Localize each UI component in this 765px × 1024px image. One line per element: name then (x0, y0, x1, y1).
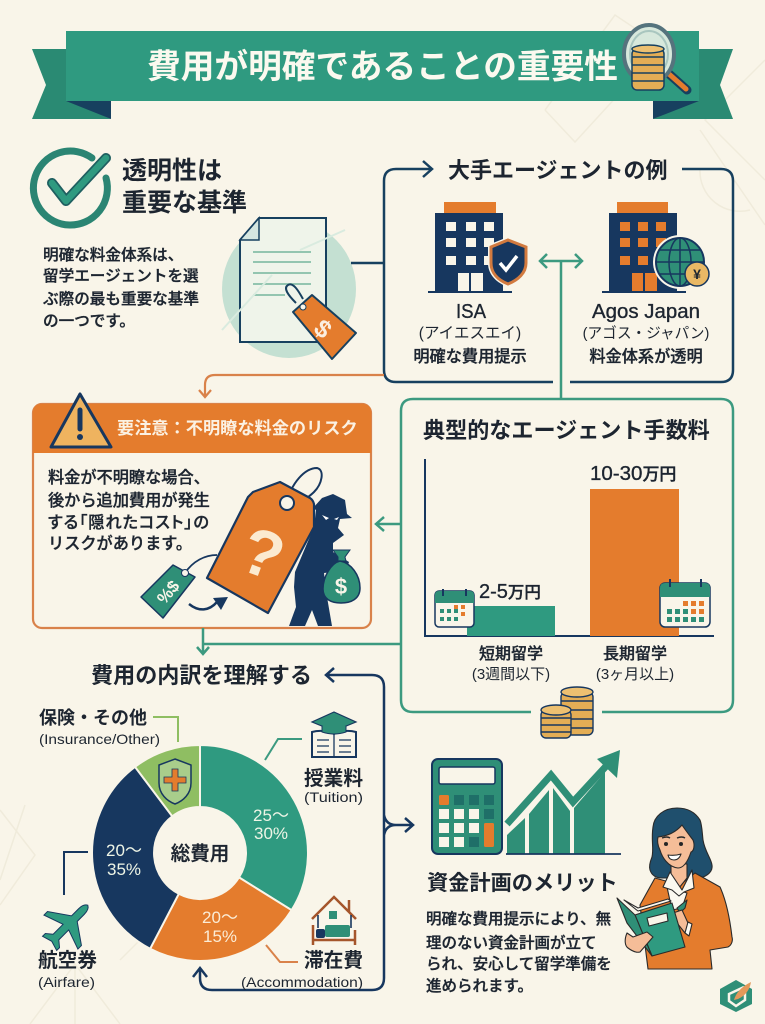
text block: funding benefits: 明確な費用提示により、無 (426, 910, 611, 928)
label: tuition: 授業料 (304, 768, 363, 790)
label: accommodation: (Accommodation) (241, 974, 363, 990)
icon: big price tag: ? (231, 511, 294, 595)
label: Agos Japan (583, 301, 709, 366)
value: short term: 2-5万円 (479, 581, 541, 603)
icon: document with price tag (222, 218, 356, 359)
connector: document to agents (351, 262, 384, 264)
icon: calendar short (435, 589, 474, 627)
panel: agent fees (401, 399, 733, 712)
heading: agent fees: 典型的なエージェント手数料 (423, 418, 710, 443)
label: airfare: (Airfare) (38, 974, 95, 990)
label: accommodation: 滞在費 (304, 950, 363, 972)
heading: transparency: 重要な基準 (122, 189, 247, 217)
label: Agos Japan: Agos Japan (592, 301, 700, 323)
icon: Agos Japan building (602, 202, 709, 292)
label: tuition (265, 739, 363, 805)
label: short term: (3週間以下) (472, 666, 550, 683)
text block: warning: 後から追加費用が発生 (48, 491, 210, 510)
heading: cost breakdown: 費用の内訳を理解する (91, 663, 312, 688)
arrow: agents to warning (199, 375, 384, 397)
text block: warning: リスクがあります。 (48, 534, 192, 553)
logo (720, 980, 752, 1012)
icon: check mark in circle (33, 151, 107, 225)
arrow: fees to warning (376, 517, 401, 531)
text block: transparency: ぶ際の最も重要な基準 (43, 290, 199, 308)
icon: small green tag (141, 555, 217, 618)
arrow: navy routing (193, 668, 413, 990)
label: Agos Japan: (アゴス・ジャパン) (583, 324, 709, 342)
label: tuition: (Tuition) (304, 789, 363, 805)
heading: warning: 要注意：不明瞭な料金のリスク (117, 418, 358, 438)
icon: house with bed (312, 897, 356, 945)
value: accommodation: 20〜 (202, 908, 238, 927)
icon: ISA building (428, 202, 529, 292)
label: airfare (38, 852, 97, 990)
value: tuition: 25〜 (253, 806, 289, 825)
chart: growth arrow (506, 750, 621, 854)
text block: warning (48, 468, 210, 553)
icon: Agos Japan building: ¥ (693, 266, 701, 282)
heading: funding benefits: 資金計画のメリット (427, 871, 618, 895)
icon: big price tag (207, 468, 322, 613)
label: ISA: 明確な費用提示 (413, 348, 527, 366)
icon: thief (289, 494, 360, 626)
label: long term: 長期留学 (603, 645, 667, 663)
icon: shield (159, 759, 191, 804)
label: long term: (3ヶ月以上) (596, 666, 674, 683)
label: airfare: 航空券 (38, 950, 97, 972)
text block: transparency (43, 246, 199, 330)
value: accommodation: 15% (203, 927, 237, 946)
chart: cost donut (92, 745, 308, 961)
text block: funding benefits: 進められます。 (426, 977, 533, 995)
label: ISA: (アイエスエイ) (419, 325, 521, 342)
icon: magnifier with coins (624, 25, 687, 90)
text block: transparency: 明確な料金体系は、 (43, 246, 183, 264)
bar chart: agent fees (425, 459, 714, 683)
icon: coin stacks (541, 687, 593, 738)
label: insurance (39, 708, 178, 747)
text block: warning: 料金が不明瞭な場合、 (48, 468, 210, 487)
text block: transparency: 留学エージェントを選 (43, 267, 199, 285)
icon: small green tag: %$ (153, 576, 184, 608)
arrow: double headed green (540, 254, 582, 399)
text block: funding benefits: られ、安心して留学準備を (426, 955, 612, 973)
icon: warning triangle (51, 394, 111, 447)
label: insurance: (Insurance/Other) (39, 732, 160, 747)
label: short term: 短期留学 (479, 645, 543, 663)
label: long term (596, 645, 674, 683)
text block: funding benefits: 理のない資金計画が立て (426, 933, 597, 952)
icon: calendar long (660, 579, 710, 627)
text block: warning: する「隠れたコスト」の (48, 514, 209, 532)
heading: transparency (122, 157, 247, 217)
panel: major agents (384, 158, 733, 382)
label: center: 総費用 (171, 843, 229, 865)
value: long term: 10-30万円 (590, 462, 676, 485)
label: ISA (413, 301, 527, 366)
panel: warning (33, 394, 371, 628)
label: insurance: 保険・その他 (39, 708, 147, 728)
bar: short term (467, 606, 555, 636)
label: accommodation (241, 945, 363, 990)
arrow: warning and fees to breakdown (197, 628, 401, 654)
icon: document with price tag: $ (308, 314, 337, 344)
icon: airplane (33, 888, 105, 960)
icon: woman with book (617, 808, 732, 969)
icon: calculator (432, 759, 502, 854)
value: accommodation (202, 908, 238, 946)
heading: major agents: 大手エージェントの例 (448, 158, 668, 183)
value: tuition (253, 806, 289, 843)
label: short term (472, 645, 550, 683)
icon: thief: $ (335, 574, 347, 599)
title: 費用が明確であることの重要性 (147, 47, 618, 86)
label: ISA: ISA (456, 301, 487, 323)
value: airfare: 20〜 (106, 841, 142, 860)
value: tuition: 30% (254, 824, 288, 843)
icon: book with graduation cap (312, 712, 356, 757)
title banner (32, 25, 733, 119)
heading: transparency: 透明性は (122, 157, 222, 185)
value: airfare (106, 841, 142, 879)
text block: transparency: の一つです。 (43, 312, 135, 330)
value: airfare: 35% (107, 860, 141, 879)
label: Agos Japan: 料金体系が透明 (589, 347, 703, 366)
arrow: small tag to big tag (189, 597, 228, 610)
bar: long term (590, 489, 679, 636)
text block: funding benefits (426, 910, 612, 995)
